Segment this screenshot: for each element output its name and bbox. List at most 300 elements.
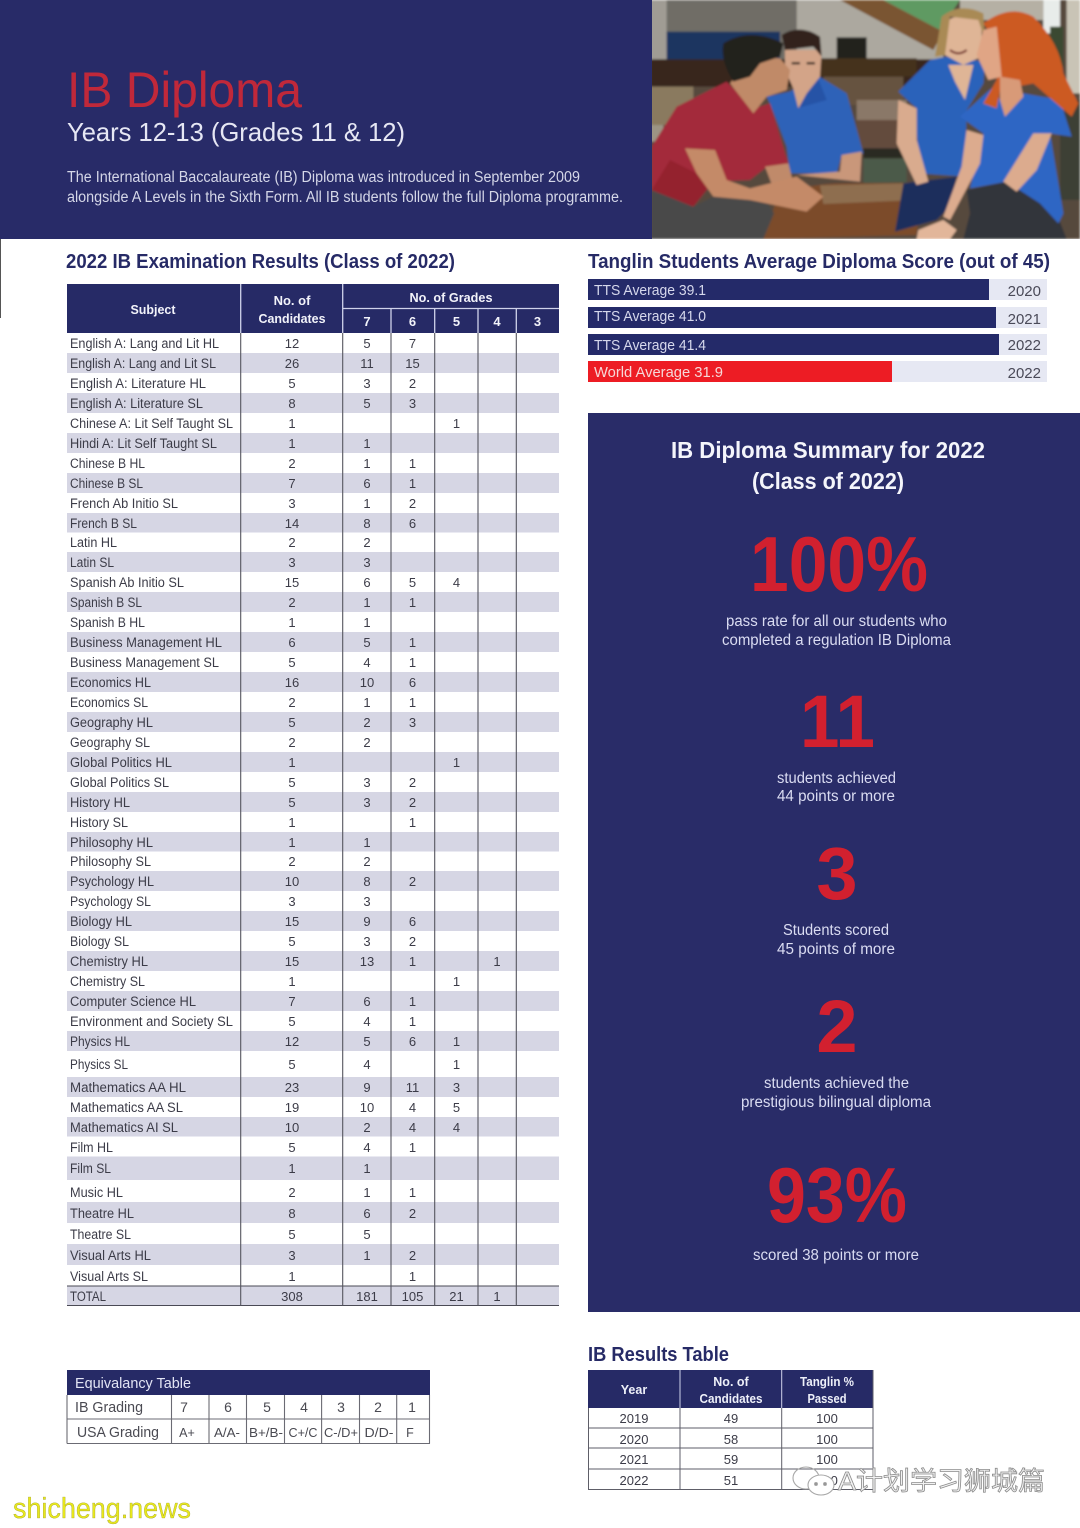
table header: 3 — [534, 314, 541, 329]
row: Spanish B SL: Spanish B SL — [70, 595, 142, 610]
results table — [67, 284, 559, 1306]
heading: exam results: 2022 IB Examination Results (Class of 2022) — [66, 251, 455, 273]
row: Business Management HL: 1 — [409, 635, 416, 650]
row: Computer Science HL: Computer Science HL — [70, 994, 196, 1009]
row: Global Politics HL: 1 — [288, 755, 296, 770]
stat: 93% — [753, 1151, 919, 1264]
row: Biology HL: 15 — [285, 914, 299, 929]
row: 2022: 2022 — [620, 1473, 648, 1488]
row: Economics HL: Economics HL — [70, 675, 151, 690]
row: Geography SL — [70, 735, 371, 750]
row: IB grading: 3 — [337, 1399, 345, 1415]
stat: 11: 11 — [800, 680, 875, 763]
row: Latin SL — [67, 552, 559, 572]
row: Economics SL: 1 — [363, 695, 371, 710]
row: Music HL — [70, 1185, 416, 1200]
row: Mathematics AA HL: 23 — [285, 1080, 299, 1095]
row: Visual Arts SL: 1 — [288, 1269, 296, 1284]
row: English A Lang and Lit SL: 26 — [285, 356, 299, 371]
row: Psychology SL: 3 — [288, 894, 296, 909]
row: USA grading: F — [406, 1426, 414, 1440]
intro text — [67, 169, 623, 206]
row: Computer Science HL: 6 — [363, 994, 371, 1009]
row: Physics SL: 4 — [363, 1057, 371, 1072]
row: Mathematics AA HL: 9 — [363, 1080, 371, 1095]
row: Film SL: 1 — [363, 1161, 371, 1176]
row: History HL: History HL — [70, 795, 130, 810]
row: Computer Science HL — [67, 991, 559, 1011]
heading: average score: Tanglin Students Average Diploma Score (out of 45) — [588, 251, 1050, 273]
row: Mathematics AA SL: 4 — [409, 1100, 416, 1115]
row: USA grading: B+/B- — [249, 1426, 283, 1440]
row: Visual Arts HL — [67, 1244, 559, 1265]
row: Philosophy HL: 1 — [363, 835, 371, 850]
photo: four students around a table — [650, 0, 1080, 239]
equivalency table — [67, 1370, 430, 1444]
row: Chinese A Lit Self Taught SL: 1 — [453, 416, 460, 431]
row: 2022 — [620, 1473, 838, 1488]
row: Chemistry SL: 1 — [453, 974, 460, 989]
row: Physics SL — [70, 1057, 460, 1072]
row: 2022: 100 — [816, 1473, 838, 1488]
row: 2020 — [620, 1432, 838, 1447]
row: 2019: 100 — [816, 1411, 838, 1426]
row: Latin HL: 2 — [288, 535, 296, 550]
row: Chinese A Lit Self Taught SL — [70, 416, 460, 431]
row: 2019: 49 — [724, 1411, 738, 1426]
row: English A Literature SL — [67, 393, 559, 413]
stat: 3: 3 — [816, 832, 858, 915]
row: USA grading: A+ — [179, 1426, 195, 1440]
stat: 100%: pass rate for all our students who — [726, 613, 947, 630]
row: French Ab Initio SL: 2 — [409, 496, 416, 511]
row: 2021 — [620, 1452, 838, 1467]
row: Philosophy SL: 2 — [363, 854, 371, 869]
row: Geography HL: 5 — [288, 715, 296, 730]
row: Latin HL — [70, 535, 371, 550]
row: total: 105 — [402, 1289, 423, 1304]
row: Latin SL: 3 — [288, 555, 296, 570]
bar: 2021: TTS Average 41.0 — [594, 308, 706, 325]
results header: No. of — [713, 1375, 750, 1389]
row: English A Lang and Lit SL — [67, 353, 559, 373]
row: Chinese B SL: 6 — [363, 476, 371, 491]
row: Physics SL: 1 — [453, 1057, 460, 1072]
bar: world average 2022: 2022 — [1008, 365, 1041, 382]
row: Biology HL — [67, 911, 559, 931]
row: total — [67, 1286, 559, 1306]
row: Business Management HL: 5 — [363, 635, 371, 650]
stat: 100%: 100% — [750, 520, 928, 608]
results header — [588, 1370, 873, 1408]
row: Latin HL: 2 — [363, 535, 371, 550]
row: Economics HL: 10 — [360, 675, 374, 690]
results header: Passed — [808, 1392, 846, 1406]
row: Physics SL: 5 — [288, 1057, 296, 1072]
row: Theatre HL: 8 — [288, 1206, 296, 1221]
row: Mathematics AI SL: 2 — [363, 1120, 371, 1135]
row: Business Management HL: 6 — [288, 635, 296, 650]
row: Biology HL: 9 — [363, 914, 371, 929]
row: Chemistry SL: 1 — [288, 974, 296, 989]
bar: 2020: 2020 — [1008, 283, 1041, 300]
row: Latin SL: Latin SL — [70, 555, 114, 570]
row: Global Politics HL: Global Politics HL — [70, 755, 172, 770]
row: History HL — [67, 792, 559, 812]
row: Psychology HL: Psychology HL — [70, 874, 154, 889]
row: Chemistry SL — [70, 974, 460, 989]
panel heading: IB Diploma Summary for 2022 — [671, 437, 985, 463]
row: Film HL: Film HL — [70, 1140, 113, 1155]
row: Spanish B SL: 1 — [363, 595, 371, 610]
row: English A Literature HL: 3 — [363, 376, 371, 391]
row: Physics HL: Physics HL — [70, 1034, 130, 1049]
table header: 4 — [493, 314, 501, 329]
row: English A Lang and Lit SL: 15 — [405, 356, 420, 371]
row: Business Management SL: 1 — [409, 655, 416, 670]
bar: 2022: TTS Average 41.4 — [594, 337, 706, 354]
row: Geography SL: Geography SL — [70, 735, 150, 750]
stat: 11: 44 points or more — [777, 788, 895, 805]
row: Spanish Ab Initio SL: Spanish Ab Initio SL — [70, 575, 184, 590]
row: Chinese B SL: Chinese B SL — [70, 476, 143, 491]
results header: Candidates — [700, 1392, 763, 1406]
row: Chemistry HL: 1 — [409, 954, 416, 969]
row: Chinese B HL: 1 — [363, 456, 371, 471]
row: USA grading — [77, 1424, 414, 1441]
row: Film HL: 5 — [288, 1140, 296, 1155]
table header: No. of — [274, 293, 311, 308]
row: Psychology SL — [70, 894, 371, 909]
row: Economics HL — [67, 672, 559, 692]
row: Environment and Society SL: 5 — [288, 1014, 296, 1029]
intro text: alongside A Levels in the Sixth Form. All IB students follow the full Diploma programme. — [67, 189, 623, 206]
bar: 2022 — [588, 334, 1047, 355]
row: total: 308 — [281, 1289, 303, 1304]
row: Philosophy HL: 1 — [288, 835, 296, 850]
row: Visual Arts SL: Visual Arts SL — [70, 1269, 148, 1284]
results header: Year — [621, 1383, 647, 1397]
row: Spanish Ab Initio SL: 6 — [363, 575, 371, 590]
row: Physics HL: 1 — [453, 1034, 460, 1049]
row: Computer Science HL: 1 — [409, 994, 416, 1009]
row: Spanish Ab Initio SL — [70, 575, 460, 590]
row: Chemistry HL: 1 — [493, 954, 501, 969]
row: Biology HL: Biology HL — [70, 914, 132, 929]
table header: Candidates — [258, 311, 326, 326]
stat: 11 — [777, 680, 896, 805]
row: 2019 — [620, 1411, 838, 1426]
row: French B SL: 6 — [409, 516, 416, 531]
row: Spanish B HL: 1 — [288, 615, 296, 630]
row: French B SL: 14 — [285, 516, 299, 531]
bar chart: average diploma score — [588, 279, 1047, 382]
row: History SL — [70, 815, 416, 830]
row: Mathematics AI SL: 10 — [285, 1120, 299, 1135]
stat: 2: students achieved the — [764, 1075, 909, 1092]
watermark: shicheng.news: shicheng.news — [13, 1493, 191, 1525]
row: Chemistry HL — [67, 951, 559, 971]
title: IB Diploma — [67, 62, 302, 118]
row: Visual Arts HL: 1 — [363, 1248, 371, 1263]
row: Visual Arts SL: 1 — [409, 1269, 416, 1284]
row: IB grading — [75, 1399, 416, 1416]
row: Mathematics AI SL: Mathematics AI SL — [70, 1120, 178, 1135]
row: Film HL: 1 — [409, 1140, 416, 1155]
row: French Ab Initio SL — [70, 496, 416, 511]
stat: 3 — [777, 832, 895, 958]
row: Theatre HL: 6 — [363, 1206, 371, 1221]
row: Spanish B SL — [67, 592, 559, 612]
row: Film HL: 4 — [363, 1140, 371, 1155]
table header: 6 — [409, 314, 416, 329]
row: Hindi A Lit Self Taught SL: 1 — [363, 436, 371, 451]
row: Computer Science HL: 7 — [288, 994, 296, 1009]
row: Biology SL — [70, 934, 416, 949]
stat: 93%: 93% — [767, 1151, 907, 1239]
row: Theatre HL — [67, 1202, 559, 1223]
row: Biology SL: Biology SL — [70, 934, 129, 949]
row: Global Politics SL: 3 — [363, 775, 371, 790]
bar: world average 2022: World Average 31.9 — [594, 364, 723, 381]
row: USA grading: C+/C — [288, 1426, 318, 1440]
table header: 5 — [453, 314, 460, 329]
row: IB grading: 2 — [374, 1399, 382, 1415]
row: Environment and Society SL: 4 — [363, 1014, 371, 1029]
row: History HL: 5 — [288, 795, 296, 810]
row: Geography HL: 3 — [409, 715, 416, 730]
row: Biology SL: 2 — [409, 934, 416, 949]
row: Mathematics AA SL: 5 — [453, 1100, 460, 1115]
panel: IB Diploma summary — [588, 413, 1080, 1312]
row: total: 1 — [493, 1289, 501, 1304]
row: Film SL: 1 — [288, 1161, 296, 1176]
row: Psychology HL — [67, 871, 559, 891]
row: Music HL: 2 — [288, 1185, 296, 1200]
table header — [67, 284, 559, 333]
row: Geography HL: Geography HL — [70, 715, 153, 730]
row: English A Literature HL: English A: Literature HL — [70, 376, 206, 391]
row: Psychology HL: 2 — [409, 874, 416, 889]
row: USA grading: A/A- — [214, 1426, 240, 1440]
row: Philosophy SL: 2 — [288, 854, 296, 869]
row: Chemistry HL: Chemistry HL — [70, 954, 148, 969]
row: Mathematics AI SL: 4 — [453, 1120, 460, 1135]
results header: Tanglin % — [800, 1375, 854, 1389]
table header: No. of Grades — [410, 290, 492, 305]
row: Chinese B SL: 7 — [288, 476, 296, 491]
row: Spanish B SL: 1 — [409, 595, 416, 610]
row: French B SL: 8 — [363, 516, 371, 531]
row: Spanish B HL: 1 — [363, 615, 371, 630]
row: Physics HL: 12 — [285, 1034, 299, 1049]
row: Chemistry HL: 13 — [360, 954, 374, 969]
row: Physics HL: 5 — [363, 1034, 371, 1049]
row: Psychology SL: Psychology SL — [70, 894, 151, 909]
row: total: 181 — [356, 1289, 378, 1304]
row: Visual Arts HL: Visual Arts HL — [70, 1248, 151, 1263]
row: Economics SL: 1 — [409, 695, 416, 710]
row: Theatre SL: 5 — [288, 1227, 296, 1242]
row: English A Literature HL: 5 — [288, 376, 296, 391]
row: Spanish Ab Initio SL: 15 — [285, 575, 299, 590]
row: Mathematics AA SL — [70, 1100, 460, 1115]
row: Geography SL: 2 — [288, 735, 296, 750]
row: Film SL: Film SL — [70, 1161, 111, 1176]
row: Business Management HL — [67, 632, 559, 652]
stat: 11: students achieved — [777, 770, 896, 787]
row: French B SL — [67, 513, 559, 532]
row: History SL: History SL — [70, 815, 128, 830]
stat: 2 — [741, 985, 931, 1111]
IB results table — [588, 1370, 873, 1490]
row: Visual Arts HL: 2 — [409, 1248, 416, 1263]
stat: 3: Students scored — [783, 922, 889, 939]
row: Business Management HL: Business Management HL — [70, 635, 222, 650]
row: 2021: 100 — [816, 1452, 838, 1467]
row: Economics HL: 16 — [285, 675, 299, 690]
row: Business Management SL: 5 — [288, 655, 296, 670]
watermark: WeChat account name: A计划学习狮城篇 — [838, 1466, 1045, 1496]
row: Chinese A Lit Self Taught SL: 1 — [288, 416, 296, 431]
row: Geography SL: 2 — [363, 735, 371, 750]
row: Global Politics SL: 5 — [288, 775, 296, 790]
row: 2020: 100 — [816, 1432, 838, 1447]
bar: 2020: TTS Average 39.1 — [594, 282, 706, 299]
row: Mathematics AA SL: 10 — [360, 1100, 374, 1115]
table title: Equivalancy Table — [75, 1375, 191, 1392]
subtitle: Years 12-13 (Grades 11 & 12) — [67, 117, 405, 147]
row: Environment and Society SL — [70, 1014, 416, 1029]
row: History SL: 1 — [288, 815, 296, 830]
row: French Ab Initio SL: 3 — [288, 496, 296, 511]
row: 2022: 51 — [724, 1473, 738, 1488]
row: Hindi A Lit Self Taught SL: 1 — [288, 436, 296, 451]
row: Mathematics AI SL — [67, 1117, 559, 1136]
row: Philosophy SL — [70, 854, 371, 869]
row: Chinese B SL — [67, 473, 559, 493]
row: Chinese B SL: 1 — [409, 476, 416, 491]
row: History HL: 3 — [363, 795, 371, 810]
row: Mathematics AA SL: Mathematics AA SL — [70, 1100, 183, 1115]
row: English A Literature SL: 8 — [288, 396, 296, 411]
row: Global Politics HL: 1 — [453, 755, 460, 770]
row: Global Politics SL — [70, 775, 416, 790]
panel heading: (Class of 2022) — [752, 468, 904, 494]
row: Chinese B HL: 2 — [288, 456, 296, 471]
header banner — [0, 0, 652, 239]
heading: IB results table: IB Results Table — [588, 1344, 729, 1366]
row: USA grading: C-/D+ — [324, 1426, 358, 1440]
row: IB grading: 6 — [224, 1399, 232, 1415]
row: Business Management SL: 4 — [363, 655, 371, 670]
row: Philosophy HL — [67, 832, 559, 852]
row: USA grading: USA Grading — [77, 1424, 159, 1441]
row: Hindi A Lit Self Taught SL: Hindi A: Lit Self Taught SL — [70, 436, 217, 451]
row: Visual Arts SL — [70, 1269, 416, 1284]
row: English A Lang and Lit HL — [70, 336, 416, 351]
row: Economics HL: 6 — [409, 675, 416, 690]
row: English A Lang and Lit SL: English A: Lang and Lit SL — [70, 356, 216, 371]
row: total: TOTAL — [70, 1289, 106, 1304]
row: Economics SL: 2 — [288, 695, 296, 710]
row: Philosophy SL: Philosophy SL — [70, 854, 151, 869]
row: Economics SL: Economics SL — [70, 695, 148, 710]
row: Physics HL: 6 — [409, 1034, 416, 1049]
row: 2021: 59 — [724, 1452, 738, 1467]
row: English A Literature SL: 5 — [363, 396, 371, 411]
bar: 2020 — [588, 279, 1047, 300]
row: Geography HL: 2 — [363, 715, 371, 730]
row: English A Lang and Lit HL: 5 — [363, 336, 371, 351]
row: Mathematics AA HL — [67, 1077, 559, 1097]
intro text: The International Baccalaureate (IB) Diploma was introduced in September 2009 — [67, 169, 580, 186]
row: Biology SL: 3 — [363, 934, 371, 949]
row: IB grading: 4 — [300, 1399, 308, 1415]
row: Mathematics AI SL: 4 — [409, 1120, 416, 1135]
row: Latin HL: Latin HL — [70, 535, 117, 550]
row: Hindi A Lit Self Taught SL — [67, 433, 559, 453]
row: Chinese B HL: Chinese B HL — [70, 456, 145, 471]
table header: Subject — [130, 302, 176, 317]
row: History SL: 1 — [409, 815, 416, 830]
row: IB grading: IB Grading — [75, 1399, 143, 1416]
row: Global Politics SL: 2 — [409, 775, 416, 790]
bar: world average 2022 — [588, 361, 1047, 382]
row: French B SL: French B SL — [70, 516, 137, 531]
row: Mathematics AA SL: 19 — [285, 1100, 299, 1115]
row: Global Politics SL: Global Politics SL — [70, 775, 169, 790]
row: IB grading: 7 — [180, 1399, 188, 1415]
row: 2020: 58 — [724, 1432, 738, 1447]
row: English A Lang and Lit HL: 12 — [285, 336, 299, 351]
row: Film SL — [67, 1156, 559, 1180]
row: Spanish B SL: 2 — [288, 595, 296, 610]
panel heading — [671, 437, 985, 494]
row: Music HL: 1 — [409, 1185, 416, 1200]
row: Economics SL — [70, 695, 416, 710]
bar: 2021 — [588, 307, 1047, 328]
row: Spanish B HL: Spanish B HL — [70, 615, 145, 630]
row: Spanish Ab Initio SL: 4 — [453, 575, 460, 590]
stat: 2: 2 — [816, 985, 858, 1068]
row: Psychology HL: 10 — [285, 874, 299, 889]
row: Business Management SL: Business Management SL — [70, 655, 219, 670]
row: Psychology SL: 3 — [363, 894, 371, 909]
row: English A Lang and Lit SL: 11 — [360, 356, 374, 371]
row: French Ab Initio SL: French Ab Initio SL — [70, 496, 178, 511]
row: English A Literature HL — [70, 376, 416, 391]
row: Environment and Society SL: Environment and Society SL — [70, 1014, 233, 1029]
row: Music HL: Music HL — [70, 1185, 123, 1200]
row: IB grading: 1 — [408, 1399, 416, 1415]
row: Biology SL: 5 — [288, 934, 296, 949]
row: 2019: 2019 — [620, 1411, 648, 1426]
icon: chat bubbles — [793, 1467, 834, 1495]
row: History HL: 2 — [409, 795, 416, 810]
row: Theatre SL: 5 — [363, 1227, 371, 1242]
row: Spanish B HL — [70, 615, 371, 630]
row: English A Literature HL: 2 — [409, 376, 416, 391]
stat: 100%: completed a regulation IB Diploma — [722, 632, 951, 649]
row: Theatre SL: Theatre SL — [70, 1227, 131, 1242]
stat: 3: 45 points of more — [777, 941, 895, 958]
row: Theatre HL: Theatre HL — [70, 1206, 134, 1221]
row: Psychology HL: 8 — [363, 874, 371, 889]
row: Chinese B HL — [70, 456, 416, 471]
row: Latin SL: 3 — [363, 555, 371, 570]
row: English A Literature SL: English A: Literature SL — [70, 396, 203, 411]
